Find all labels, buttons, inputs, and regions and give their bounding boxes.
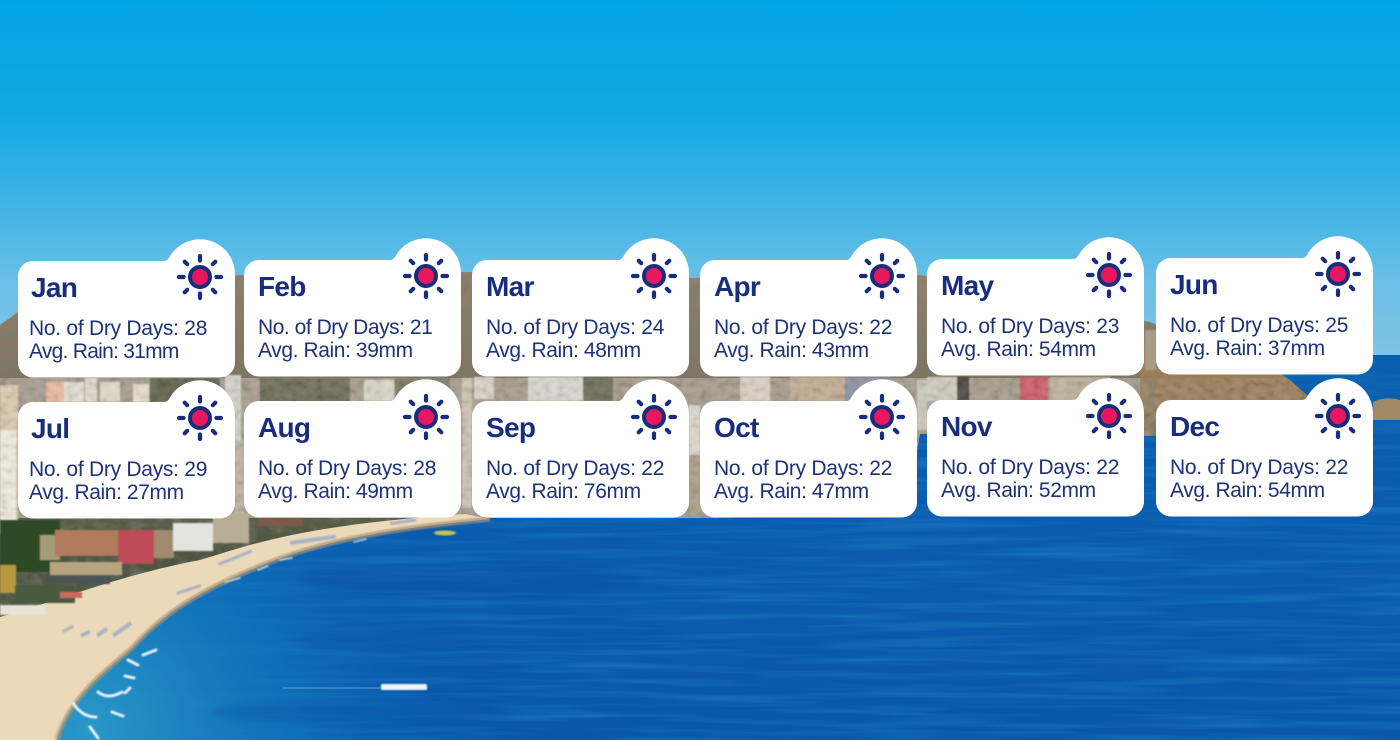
card: November bbox=[927, 378, 1144, 516]
month: Oct bbox=[714, 412, 759, 443]
icon: sun bbox=[1088, 254, 1130, 296]
stats: No. of Dry Days: 22 bbox=[1170, 456, 1348, 479]
month: Nov bbox=[941, 411, 993, 442]
month: Apr bbox=[714, 271, 761, 302]
stats: No. of Dry Days: 24 bbox=[486, 316, 665, 339]
stats: No. of Dry Days: 22 bbox=[714, 316, 892, 339]
background: sky bbox=[0, 0, 1400, 380]
background: mountain and town bbox=[0, 270, 1400, 620]
month: Jul bbox=[31, 413, 69, 444]
stats: Avg. Rain: 48mm bbox=[486, 339, 641, 362]
card: August bbox=[244, 379, 461, 518]
stats: No. of Dry Days: 21 bbox=[258, 316, 432, 339]
icon: sun bbox=[1317, 253, 1359, 295]
month: May bbox=[941, 270, 994, 301]
card: October bbox=[700, 379, 917, 518]
stats: Avg. Rain: 49mm bbox=[258, 480, 413, 503]
month: Feb bbox=[258, 271, 306, 302]
stats: No. of Dry Days: 22 bbox=[714, 457, 892, 480]
card: April bbox=[700, 238, 917, 376]
icon: sun bbox=[633, 396, 675, 438]
icon: sun bbox=[179, 256, 221, 298]
stats: No. of Dry Days: 22 bbox=[941, 456, 1119, 479]
stats: Avg. Rain: 27mm bbox=[29, 481, 184, 504]
card: July bbox=[18, 380, 235, 518]
background: boat bbox=[283, 684, 427, 690]
stats: No. of Dry Days: 28 bbox=[29, 317, 207, 340]
stats: Avg. Rain: 52mm bbox=[941, 479, 1096, 502]
card: June bbox=[1156, 236, 1373, 374]
month: Jan bbox=[31, 272, 77, 303]
background: sea bbox=[0, 355, 1400, 740]
background: surf bbox=[73, 539, 366, 738]
card: January bbox=[18, 239, 235, 378]
month: Mar bbox=[486, 271, 534, 302]
stats: Avg. Rain: 54mm bbox=[941, 338, 1096, 361]
icon: sun bbox=[179, 397, 221, 439]
stats: Avg. Rain: 47mm bbox=[714, 480, 869, 503]
background: inflatable float bbox=[434, 530, 456, 536]
card: March bbox=[472, 238, 689, 376]
stats: Avg. Rain: 39mm bbox=[258, 339, 413, 362]
background: beach umbrellas bbox=[62, 518, 416, 638]
stats: No. of Dry Days: 22 bbox=[486, 457, 664, 480]
stats: Avg. Rain: 37mm bbox=[1170, 337, 1325, 360]
card: December bbox=[1156, 378, 1373, 516]
stats: Avg. Rain: 43mm bbox=[714, 339, 869, 362]
stats: No. of Dry Days: 25 bbox=[1170, 314, 1348, 337]
background: wet shoreline bbox=[57, 519, 490, 740]
icon: sun bbox=[861, 255, 903, 297]
month: Jun bbox=[1170, 269, 1218, 300]
icon: sun bbox=[1088, 395, 1130, 437]
card: February bbox=[244, 238, 461, 376]
icon: sun bbox=[861, 396, 903, 438]
month: Sep bbox=[486, 412, 535, 443]
stats: Avg. Rain: 31mm bbox=[29, 340, 179, 363]
stats: No. of Dry Days: 23 bbox=[941, 315, 1119, 338]
icon: sun bbox=[405, 255, 447, 297]
stats: No. of Dry Days: 29 bbox=[29, 458, 207, 481]
month: Aug bbox=[258, 412, 310, 443]
background: beach bbox=[0, 514, 490, 740]
stats: Avg. Rain: 76mm bbox=[486, 480, 641, 503]
icon: sun bbox=[633, 255, 675, 297]
icon: sun bbox=[405, 396, 447, 438]
month: Dec bbox=[1170, 411, 1219, 442]
background: beachfront hotels bbox=[0, 513, 303, 615]
icon: sun bbox=[1317, 395, 1359, 437]
card: September bbox=[472, 379, 689, 518]
card: May bbox=[927, 237, 1144, 376]
stats: Avg. Rain: 54mm bbox=[1170, 479, 1325, 502]
background: headland island bbox=[1373, 398, 1400, 420]
stats: No. of Dry Days: 28 bbox=[258, 457, 436, 480]
